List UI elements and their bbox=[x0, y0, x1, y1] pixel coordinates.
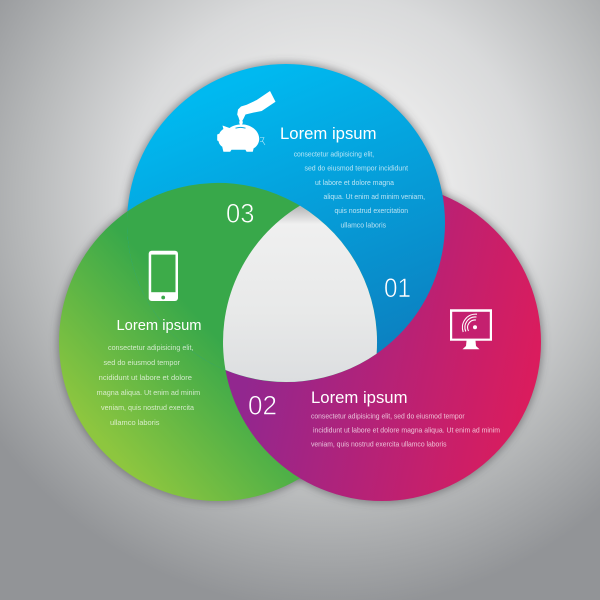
text block: green: sed do eiusmod tempor bbox=[104, 358, 181, 367]
number 01: 01 bbox=[384, 273, 411, 303]
panel: green overlap on blue bbox=[127, 183, 377, 382]
text block: green: veniam, quis nostrud exercita bbox=[101, 403, 194, 412]
icon: smartphone bbox=[149, 251, 178, 301]
text block: blue bbox=[294, 150, 425, 230]
text block: pink: consectetur adipisicing elit, sed do eiusmod tempor bbox=[311, 412, 465, 420]
text block: blue: aliqua. Ut enim ad minim veniam, bbox=[324, 192, 425, 201]
heading: blue: Lorem ipsum bbox=[280, 125, 376, 143]
text block: green: ncididunt ut labore et dolore bbox=[99, 373, 192, 382]
text block: green bbox=[97, 343, 200, 427]
centre shape bbox=[223, 206, 377, 382]
number 03: 03 bbox=[226, 198, 254, 228]
heading: green: Lorem ipsum bbox=[116, 318, 202, 334]
panel: green circle bbox=[59, 183, 377, 501]
text block: green: magna aliqua. Ut enim ad minim bbox=[97, 388, 200, 397]
icon: monitor with wifi bbox=[450, 309, 492, 349]
text block: blue: sed do eiusmod tempor incididunt bbox=[304, 164, 408, 172]
text block: green: ullamco laboris bbox=[110, 418, 160, 427]
icon: piggy bank bbox=[217, 124, 259, 152]
number 02: 02 bbox=[248, 390, 277, 420]
text block: blue: quis nostrud exercitation bbox=[334, 206, 408, 215]
heading: pink: Lorem ipsum bbox=[311, 389, 408, 407]
icon: hand dropping coin bbox=[237, 91, 276, 120]
text block: blue: consectetur adipisicing elit, bbox=[294, 150, 374, 158]
panel: pink circle bbox=[223, 183, 541, 501]
text block: pink: incididunt ut labore et dolore magna aliqua. Ut enim ad minim bbox=[313, 426, 500, 434]
icon: coin bbox=[239, 120, 243, 125]
panel: blue circle bbox=[127, 64, 445, 382]
text block: pink bbox=[311, 412, 500, 448]
circle shadows bbox=[57, 62, 543, 503]
icon: piggy tail bbox=[260, 138, 265, 145]
text block: blue: ullamco laboris bbox=[340, 220, 386, 230]
text block: pink: veniam, quis nostrud exercita ullamco laboris bbox=[311, 440, 447, 448]
text block: blue: ut labore et dolore magna bbox=[315, 178, 394, 187]
icon: hand and piggy bank bbox=[217, 91, 276, 152]
text block: green: consectetur adipisicing elit, bbox=[108, 343, 194, 352]
piggy bank slot bbox=[236, 126, 246, 129]
